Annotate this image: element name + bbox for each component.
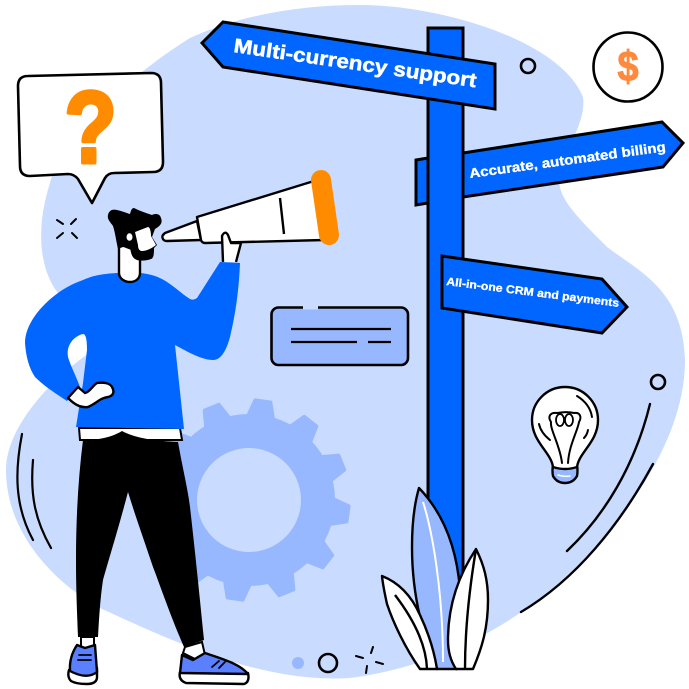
crm text: All-in-one CRM and payments [446,276,620,310]
question mark: ? [64,70,117,184]
plant [382,488,488,669]
light bulb [532,387,598,483]
left ankle [81,637,94,649]
right ankle [183,642,205,659]
motion lines left [17,434,51,548]
billing text: Accurate, automated billing [468,139,667,181]
sparkle bottom [356,647,383,673]
speech bubble [18,70,163,203]
neck [119,244,140,282]
trousers [76,431,204,647]
bottom dots [292,654,337,672]
card lines [291,329,391,342]
small ring right [651,375,665,389]
person [25,180,329,684]
multi-currency text: Multi-currency support [232,35,478,92]
center leaf [412,488,460,669]
sweater [25,262,240,429]
left leaf [382,576,437,669]
sign: multi-currency [202,22,495,109]
raised hand [222,233,241,262]
telescope [162,181,324,243]
sign: billing [463,122,683,197]
left shoe [68,645,97,684]
post [428,28,463,653]
card [272,308,408,365]
right leaf [448,549,488,669]
sign: crm [442,256,627,333]
hand on hip [68,383,113,407]
shirt hem [79,428,182,440]
right shoe [180,653,248,684]
telescope orange rim [321,180,329,235]
face [135,227,156,251]
ear [126,233,132,241]
hair and beard [108,208,162,261]
gear [148,399,350,601]
dollar badge [594,32,662,102]
small ring top [521,59,535,73]
signpost [416,28,463,653]
motion arcs right [521,404,653,612]
sparkle left [57,219,77,238]
rear stub of billing sign [416,158,428,205]
dollar sign: $ [617,42,639,91]
